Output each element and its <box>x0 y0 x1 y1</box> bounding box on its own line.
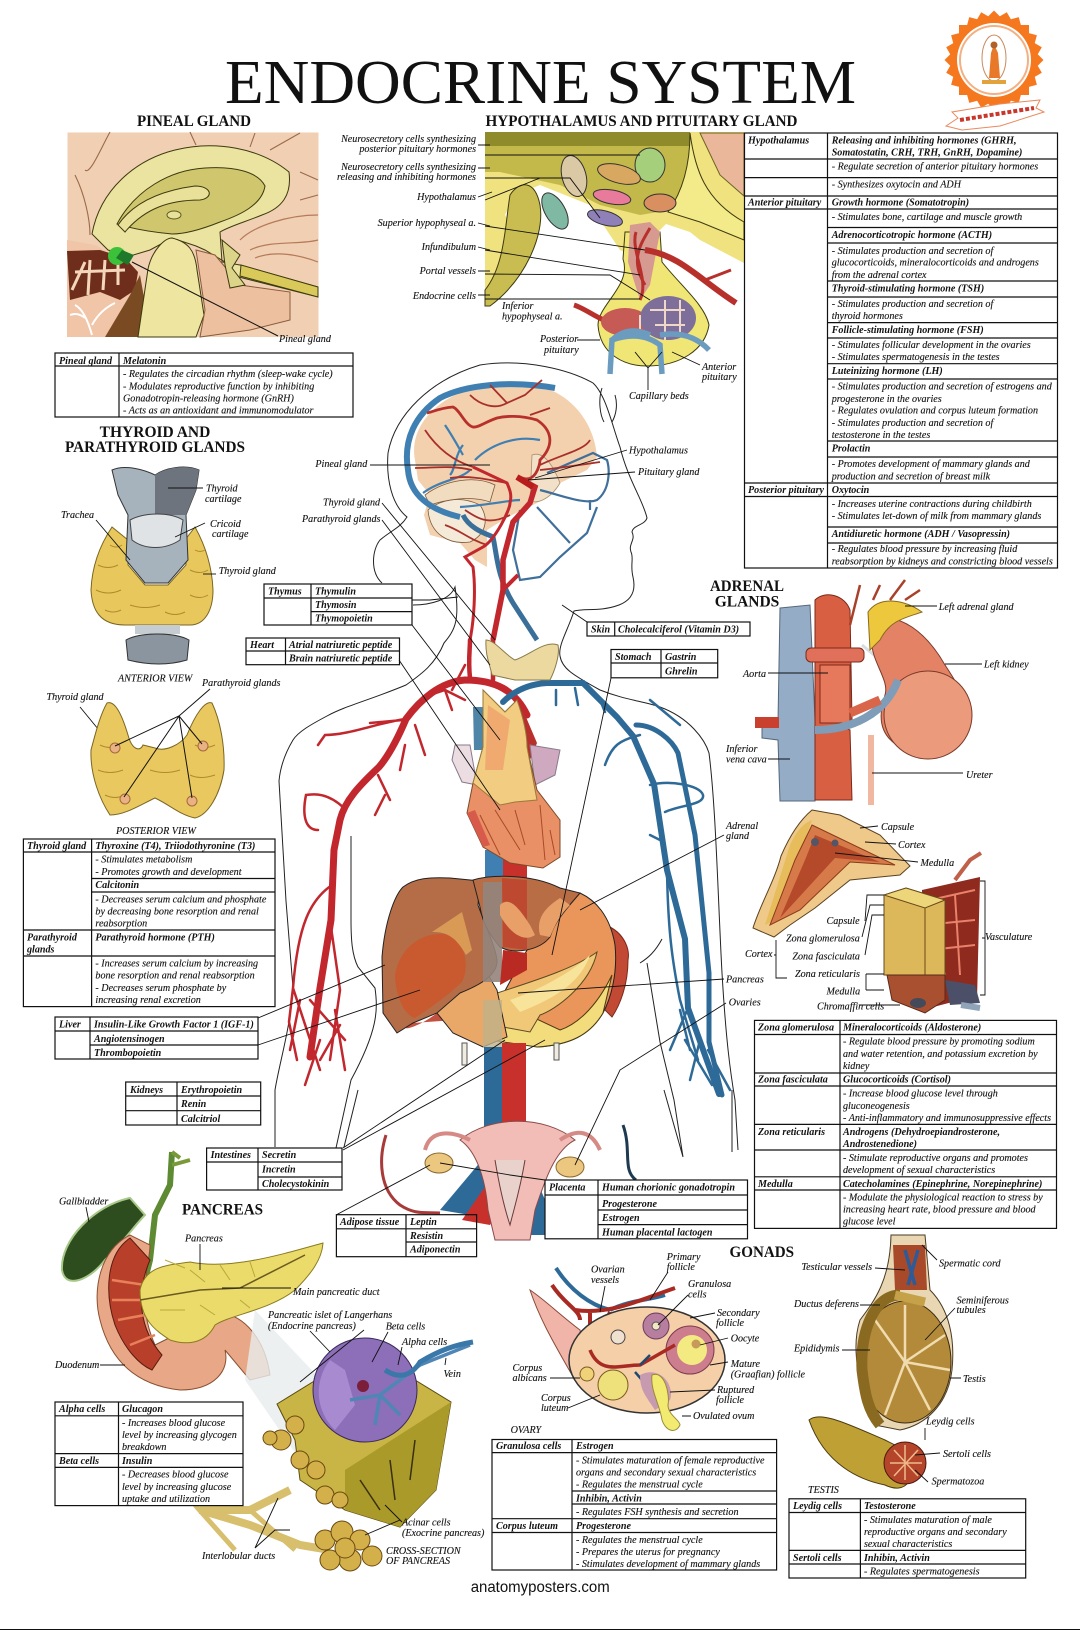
labels: adrenal cross section: Zona reticularis <box>795 969 860 980</box>
labels: hypothalamus callouts: Endocrine cells <box>412 291 476 302</box>
table: ovary hormones: - Regulates FSH synthesis and secretion <box>576 1507 738 1518</box>
table: adrenal zones: Zona glomerulosa <box>757 1023 834 1034</box>
table: thymus <box>264 584 412 625</box>
label: posterior view: POSTERIOR VIEW <box>115 826 197 837</box>
labels: ovary: Ovarian <box>591 1264 625 1276</box>
labels and leader lines: body: Pituitary gland <box>637 467 700 478</box>
table: heart: Atrial natriuretic peptide <box>288 640 393 651</box>
labels: hypothalamus callouts: Infundibulum <box>421 242 476 253</box>
table: hypothalamus and pituitary hormones: - Stimulates production and secretion of <box>832 418 994 429</box>
table: kidneys: Kidneys <box>129 1085 163 1096</box>
table: hypothalamus and pituitary hormones: - Regulates blood pressure by increasing fluid <box>832 544 1018 555</box>
labels: testis: Sertoli cells <box>943 1449 991 1460</box>
table: adipose tissue: Adipose tissue <box>339 1217 400 1228</box>
table: hypothalamus and pituitary hormones: - Stimulates follicular development in the ovaries <box>832 340 1031 351</box>
table: liver: Angiotensinogen <box>93 1034 165 1045</box>
table: thyroid and parathyroid hormones: Thyroid gland <box>27 841 87 852</box>
table: pineal gland melatonin: - Modulates reproductive function by inhibiting <box>123 382 314 392</box>
labels and leader lines: body: Ovaries <box>729 998 761 1009</box>
labels: testis: Epididymis <box>793 1344 839 1355</box>
table: hypothalamus and pituitary hormones: Posterior pituitary <box>748 485 825 496</box>
table: hypothalamus and pituitary hormones: Releasing and inhibiting hormones (GHRH, <box>831 136 1017 146</box>
table: stomach: Ghrelin <box>665 666 698 677</box>
table: pineal gland melatonin: Pineal gland <box>59 356 113 367</box>
illustration: thymus <box>486 640 558 680</box>
labels: thyroid anterior: Thyroid <box>206 484 239 495</box>
heading: adrenal glands <box>710 578 784 610</box>
labels: ovary: Secondary <box>717 1308 760 1319</box>
table: kidneys <box>126 1082 261 1125</box>
labels: hypothalamus callouts: Capillary beds <box>629 391 689 402</box>
table: hypothalamus and pituitary hormones: Prolactin <box>832 444 871 455</box>
table: adipose tissue <box>336 1215 477 1257</box>
labels: hypothalamus callouts: Neurosecretory cells synthesizing <box>340 134 476 145</box>
table: hypothalamus and pituitary hormones <box>744 133 1058 568</box>
labels: pancreas: Alpha cells <box>401 1337 447 1348</box>
table: thymus: Thymosin <box>315 600 357 611</box>
table: ovary hormones: - Stimulates development of mammary glands <box>576 1559 760 1570</box>
labels: ovary: Ovulated ovum <box>693 1411 754 1422</box>
table: hypothalamus and pituitary hormones: from the adrenal cortex <box>832 270 927 281</box>
table: hypothalamus and pituitary hormones: Hypothalamus <box>747 136 809 146</box>
labels: thyroid anterior: Thyroid gland <box>46 692 105 703</box>
labels and leader lines: body: Parathyroid glands <box>301 514 380 525</box>
table: hypothalamus and pituitary hormones: - Stimulates spermatogenesis in the testes <box>832 352 1000 363</box>
table: thyroid and parathyroid hormones: - Stimulates metabolism <box>95 855 192 866</box>
labels: hypothalamus callouts <box>337 134 737 402</box>
table: testis hormones: - Stimulates maturation of male <box>864 1515 992 1526</box>
table: skin: Cholecalciferol (Vitamin D3) <box>618 625 739 636</box>
illustration: vena cava and aorta <box>452 703 560 910</box>
table: adipose tissue: Adiponectin <box>409 1244 461 1256</box>
labels: pancreas: Vein <box>444 1369 461 1380</box>
labels: adrenal cross section <box>745 822 1033 1012</box>
table: thyroid and parathyroid hormones: by decreasing bone resorption and renal <box>95 907 259 918</box>
table: hypothalamus and pituitary hormones: testosterone in the testes <box>832 430 930 441</box>
table: adrenal zones: and water retention, and potassium excretion by <box>843 1049 1038 1060</box>
illustration: heart <box>467 690 560 868</box>
table: adrenal zones: Zona reticularis <box>757 1127 825 1138</box>
table: adrenal zones: increasing heart rate, blood pressure and blood <box>843 1205 1037 1216</box>
table: placenta: Progesterone <box>602 1199 657 1210</box>
labels: thyroid anterior: Cricoid <box>210 519 242 530</box>
table: hypothalamus and pituitary hormones: - Stimulates production and secretion of estrogens and <box>832 382 1053 393</box>
labels: pancreas: Acinar cells <box>401 1518 451 1529</box>
labels: ovary: Primary <box>666 1252 701 1263</box>
panel: human body with endocrine organs <box>55 363 764 1257</box>
table: adrenal zones: - Regulate blood pressure by promoting sodium <box>843 1036 1035 1048</box>
table: hypothalamus and pituitary hormones: - Stimulates let-down of milk from mammary glands <box>832 511 1041 522</box>
labels: adrenal cross section: Medulla <box>826 987 860 998</box>
heading: adrenal glands: ADRENAL <box>710 578 784 595</box>
labels: ovary: cells <box>688 1290 707 1301</box>
table: hypothalamus and pituitary hormones: Thyroid-stimulating hormone (TSH) <box>832 284 984 294</box>
labels: ovary: Granulosa <box>688 1279 731 1290</box>
labels: ovary: Corpus <box>541 1393 571 1404</box>
labels: ovary: albicans <box>512 1373 547 1384</box>
labels: ovary: vessels <box>591 1275 619 1286</box>
table: skin: Skin <box>591 625 610 636</box>
table: hypothalamus and pituitary hormones: - Synthesizes oxytocin and ADH <box>832 180 962 191</box>
illustration: thyroid posterior view <box>91 689 224 818</box>
table: alpha and beta cells: level by increasing glucose <box>122 1482 232 1493</box>
table: ovary hormones: Inhibin, Activin <box>575 1494 642 1504</box>
labels: ovary: (Graafian) follicle <box>731 1370 806 1380</box>
table: thyroid and parathyroid hormones: - Decreases serum calcium and phosphate <box>95 895 267 906</box>
labels: ovary <box>511 1252 806 1436</box>
table: hypothalamus and pituitary hormones: Antidiuretic hormone (ADH / Vasopressin) <box>831 529 1010 540</box>
labels: pancreas: Pancreas <box>184 1234 223 1244</box>
table: testis hormones: reproductive organs and secondary <box>864 1527 1007 1538</box>
table: hypothalamus and pituitary hormones: Anterior pituitary <box>747 198 822 209</box>
table: stomach: Gastrin <box>665 652 697 663</box>
labels: hypothalamus callouts: Anterior <box>701 362 736 373</box>
table: kidneys: Calcitriol <box>181 1114 220 1125</box>
labels: ovary: luteum <box>541 1403 568 1414</box>
labels: pancreas <box>54 1197 485 1567</box>
table: hypothalamus and pituitary hormones: - Stimulates production and secretion of <box>832 299 994 310</box>
table: ovary hormones: - Stimulates maturation of female reproductive <box>576 1456 765 1467</box>
labels: thyroid anterior: Trachea <box>61 510 94 521</box>
heading: adrenal glands: GLANDS <box>715 594 779 610</box>
illustration: testis <box>809 1235 953 1488</box>
labels: testis: Spermatozoa <box>932 1477 984 1488</box>
illustration: kidney, aorta and vena cava <box>755 580 972 805</box>
table: alpha and beta cells: level by increasing glycogen <box>122 1430 237 1441</box>
labels: pancreas: Interlobular ducts <box>201 1551 275 1562</box>
table: thyroid and parathyroid hormones: increasing renal excretion <box>95 995 201 1006</box>
table: adrenal zones <box>754 1020 1056 1228</box>
table: adrenal zones: kidney <box>843 1061 870 1072</box>
table: thymus: Thymus <box>268 586 302 597</box>
labels: pancreas: Beta cells <box>386 1322 425 1333</box>
table: thyroid and parathyroid hormones: reabsorption <box>95 919 147 930</box>
heading: thyroid and parathyroid <box>65 424 245 456</box>
labels: pancreas: CROSS-SECTION <box>386 1546 462 1557</box>
table: alpha and beta cells: - Increases blood glucose <box>122 1418 226 1429</box>
labels: testis: Ductus deferens <box>793 1299 859 1310</box>
table: heart <box>246 638 400 665</box>
footer: website: anatomyposters.com <box>471 1579 610 1596</box>
labels: pancreas: (Exocrine pancreas) <box>402 1528 485 1539</box>
table: liver: Insulin-Like Growth Factor 1 (IGF-1) <box>93 1020 254 1031</box>
table: liver: Thrombopoietin <box>94 1048 162 1059</box>
illustration: ovary <box>530 1268 725 1430</box>
table: skin <box>587 622 750 636</box>
illustration: pelvic reproductive organs <box>382 1121 636 1240</box>
labels: pancreas: Duodenum <box>54 1360 99 1371</box>
logo: orange sunburst emblem <box>945 11 1044 130</box>
labels: ovary: Corpus <box>512 1363 542 1374</box>
labels: thyroid anterior: ANTERIOR VIEW <box>117 674 194 684</box>
labels: hypothalamus callouts: releasing and inhibiting hormones <box>337 172 476 183</box>
table: alpha and beta cells: Glucagon <box>122 1404 163 1415</box>
labels: ovary: Ruptured <box>716 1385 755 1396</box>
panel: pancreas <box>54 1152 485 1571</box>
table: hypothalamus and pituitary hormones: - Promotes development of mammary glands and <box>832 459 1031 470</box>
table: alpha and beta cells: - Decreases blood glucose <box>122 1470 229 1481</box>
table: placenta <box>545 1180 748 1239</box>
table: pineal gland melatonin: - Regulates the circadian rhythm (sleep-wake cycle) <box>123 369 333 380</box>
heading: gonads: GONADS <box>730 1244 794 1261</box>
table: thyroid and parathyroid hormones: Thyroxine (T4), Triiodothyronine (T3) <box>95 841 255 852</box>
labels: pancreas: (Endocrine pancreas) <box>268 1321 357 1332</box>
labels: pancreas: Main pancreatic duct <box>292 1287 380 1298</box>
labels: ovary: Oocyte <box>731 1334 760 1345</box>
table: placenta: Estrogen <box>601 1213 640 1224</box>
labels and leader lines: body <box>258 446 764 1215</box>
labels: adrenal cross section: Chromaffin cells <box>817 1001 884 1012</box>
table: adipose tissue: Resistin <box>409 1231 443 1242</box>
labels: thyroid anterior: Parathyroid glands <box>201 678 280 689</box>
table: testis hormones: Sertoli cells <box>793 1553 842 1564</box>
table: alpha and beta cells: uptake and utilization <box>122 1494 210 1505</box>
labels: adrenal cross section: Cortex <box>745 949 773 960</box>
table: adrenal zones: - Anti-inflammatory and immunosuppressive effects <box>843 1113 1051 1124</box>
illustration: abdominal organs <box>382 876 628 1160</box>
table: hypothalamus and pituitary hormones: Oxytocin <box>832 485 870 496</box>
table: thyroid and parathyroid hormones: - Promotes growth and development <box>95 867 242 878</box>
table: ovary hormones: - Prepares the uterus for pregnancy <box>576 1547 720 1558</box>
labels and leader lines: body: Adrenal <box>725 821 758 832</box>
illustration: brain <box>407 380 609 640</box>
table: hypothalamus and pituitary hormones: Adrenocorticotropic hormone (ACTH) <box>831 230 992 241</box>
heading: hypothalamus and pituitary: HYPOTHALAMUS AND PITUITARY GLAND <box>486 113 798 130</box>
labels: testis <box>793 1245 1009 1496</box>
table: ovary hormones: - Regulates the menstrual cycle <box>576 1535 703 1546</box>
labels: kidney <box>725 602 1029 781</box>
table: testis hormones: Leydig cells <box>792 1501 842 1512</box>
labels: ovary: Mature <box>730 1359 761 1370</box>
table: alpha and beta cells: breakdown <box>122 1442 166 1453</box>
labels: hypothalamus callouts: Inferior <box>501 301 533 312</box>
illustration: hypothalamus and pituitary <box>485 132 744 374</box>
table: intestines: Secretin <box>262 1150 297 1161</box>
labels: thyroid anterior <box>46 484 280 735</box>
labels: adrenal cross section: Zona glomerulosa <box>786 934 860 944</box>
table: hypothalamus and pituitary hormones: glucocorticoids, mineralocorticoids and androgens <box>832 258 1039 269</box>
labels: kidney: Aorta <box>742 669 766 680</box>
labels: adrenal cross section: Vasculature <box>985 932 1033 943</box>
table: thyroid and parathyroid hormones: Parathyroid hormone (PTH) <box>95 932 215 944</box>
table: ovary hormones <box>492 1440 777 1570</box>
table: adrenal zones: Medulla <box>757 1179 793 1190</box>
table: hypothalamus and pituitary hormones: - Regulates ovulation and corpus luteum formation <box>832 406 1038 417</box>
table: adipose tissue: Leptin <box>409 1217 437 1228</box>
table: adrenal zones: glucose level <box>843 1217 896 1228</box>
table: pineal gland melatonin <box>55 353 353 417</box>
labels: testis: Spermatic cord <box>939 1259 1002 1270</box>
table: kidneys: Erythropoietin <box>180 1085 243 1096</box>
panel: pineal gland <box>55 113 353 417</box>
labels: hypothalamus callouts: Portal vessels <box>419 266 476 277</box>
table: adrenal zones: Androgens (Dehydroepiandrosterone, <box>842 1127 1000 1138</box>
table: ovary hormones: Granulosa cells <box>496 1441 561 1452</box>
labels: hypothalamus callouts: pituitary <box>543 345 579 356</box>
labels and leader lines: body: gland <box>726 831 750 842</box>
labels: testis: Leydig cells <box>925 1417 975 1428</box>
labels: kidney: vena cava <box>726 754 767 766</box>
labels: hypothalamus callouts: Hypothalamus <box>416 192 476 203</box>
labels: kidney: Left adrenal gland <box>938 602 1015 613</box>
body outline <box>275 363 738 1157</box>
table: adrenal zones: Catecholamines (Epinephrine, Norepinephrine) <box>843 1179 1042 1190</box>
table: hypothalamus and pituitary hormones: - Stimulates production and secretion of <box>832 246 994 257</box>
table: thyroid and parathyroid hormones: bone resorption and renal reabsorption <box>95 971 255 982</box>
panel: adrenal glands <box>710 578 1056 1228</box>
labels and leader lines: body: Pancreas <box>725 974 764 986</box>
labels and leader lines: body: Hypothalamus <box>628 446 688 457</box>
panel: gonads <box>492 1235 1026 1578</box>
table: adrenal zones: Zona fasciculata <box>757 1075 828 1086</box>
table: thymus: Thymopoietin <box>315 614 373 625</box>
panel: hypothalamus and pituitary gland <box>337 113 1058 568</box>
label: pineal gland: Pineal gland <box>278 334 332 345</box>
labels: ovary: OVARY <box>511 1425 542 1436</box>
table: heart: Brain natriuretic peptide <box>288 654 393 665</box>
table: ovary hormones: Estrogen <box>575 1441 614 1452</box>
labels: thyroid anterior: cartilage <box>212 529 249 540</box>
table: hypothalamus and pituitary hormones: - Increases uterine contractions during childbirth <box>832 499 1032 510</box>
table: placenta: Placenta <box>549 1182 585 1194</box>
table: placenta: Human placental lactogen <box>601 1227 713 1238</box>
table: hypothalamus and pituitary hormones: reabsorption by kidneys and constricting blood vessels <box>832 557 1053 568</box>
table: kidneys: Renin <box>180 1099 207 1110</box>
labels: testis: TESTIS <box>808 1485 839 1496</box>
table: hypothalamus and pituitary hormones: Growth hormone (Somatotropin) <box>832 198 969 209</box>
table: adrenal zones: Glucocorticoids (Cortisol) <box>843 1075 951 1086</box>
table: hypothalamus and pituitary hormones: Somatostatin, CRH, TRH, GnRH, Dopamine) <box>832 147 1022 158</box>
table: testis hormones: Testosterone <box>864 1501 916 1512</box>
table: testis hormones: sexual characteristics <box>864 1539 952 1550</box>
labels: hypothalamus callouts: hypophyseal a. <box>502 312 563 322</box>
heading: pancreas: PANCREAS <box>182 1202 263 1219</box>
table: hypothalamus and pituitary hormones: progesterone in the ovaries <box>831 394 942 405</box>
labels: pancreas: Gallbladder <box>59 1197 108 1208</box>
title: ENDOCRINE SYSTEM <box>225 49 856 117</box>
table: liver: Liver <box>58 1020 81 1031</box>
table: hypothalamus and pituitary hormones: production and secretion of breast milk <box>831 472 991 482</box>
labels: adrenal cross section: Capsule <box>881 822 915 833</box>
labels: hypothalamus callouts: Neurosecretory cells synthesizing <box>340 162 476 173</box>
table: adrenal zones: gluconeogenesis <box>843 1101 910 1112</box>
table: alpha and beta cells <box>55 1402 243 1506</box>
table: adrenal zones: - Modulate the physiological reaction to stress by <box>843 1192 1043 1204</box>
labels: hypothalamus callouts: pituitary <box>701 372 737 383</box>
illustration: thyroid anterior view <box>91 467 213 664</box>
labels: kidney: Ureter <box>966 770 993 781</box>
table: stomach: Stomach <box>615 652 652 663</box>
labels and leader lines: body: Pineal gland <box>314 459 368 470</box>
table: hypothalamus and pituitary hormones: - Regulate secretion of anterior pituitary hormones <box>832 161 1038 172</box>
table: intestines: Cholecystokinin <box>262 1179 330 1190</box>
labels: hypothalamus callouts: posterior pituitary hormones <box>358 144 476 155</box>
illustration: gallbladder, duodenum and pancreas <box>62 1152 340 1460</box>
illustration: brain sagittal section <box>67 132 318 337</box>
labels: adrenal cross section: Zona fasciculata <box>792 952 860 962</box>
table: hypothalamus and pituitary hormones: thyroid hormones <box>832 311 903 322</box>
labels: testis: Seminiferous <box>956 1296 1009 1306</box>
table: stomach <box>611 650 718 678</box>
labels: pancreas: OF PANCREAS <box>386 1556 450 1567</box>
table: thymus: Thymulin <box>315 586 356 597</box>
labels: testis: Testis <box>963 1374 986 1385</box>
heading: thyroid and parathyroid: PARATHYROID GLANDS <box>65 439 245 456</box>
table: testis hormones: Inhibin, Activin <box>863 1553 930 1564</box>
heading: pineal gland: PINEAL GLAND <box>137 113 251 130</box>
table: ovary hormones: - Regulates the menstrual cycle <box>576 1480 703 1491</box>
table: thyroid and parathyroid hormones: Calcitonin <box>95 880 140 891</box>
labels: hypothalamus callouts: Posterior <box>539 334 578 345</box>
illustration: veins <box>503 683 730 1095</box>
labels: pancreas: Pancreatic islet of Langerhans <box>267 1310 392 1321</box>
table: thyroid and parathyroid hormones: glands <box>26 944 55 956</box>
labels: kidney: Inferior <box>725 744 757 755</box>
panel: thyroid and parathyroid glands <box>23 424 280 1007</box>
labels: ovary: follicle <box>667 1262 695 1273</box>
table: placenta: Human chorionic gonadotropin <box>601 1182 735 1194</box>
table: ovary hormones: organs and secondary sexual characteristics <box>576 1468 756 1479</box>
table: alpha and beta cells: Insulin <box>121 1456 153 1467</box>
labels: ovary: follicle <box>716 1395 745 1406</box>
table: alpha and beta cells: Beta cells <box>58 1456 99 1467</box>
labels: hypothalamus callouts: Superior hypophyseal a. <box>378 218 476 229</box>
table: adrenal zones: - Stimulate reproductive organs and promotes <box>843 1153 1028 1164</box>
table: adrenal zones: development of sexual characteristics <box>843 1165 995 1176</box>
table: hypothalamus and pituitary hormones: Luteinizing hormone (LH) <box>831 366 943 377</box>
table: intestines: Incretin <box>261 1165 296 1176</box>
table: testis hormones <box>789 1499 1026 1578</box>
labels and leader lines: body: Thyroid gland <box>323 498 381 508</box>
table: adrenal zones: Mineralocorticoids (Aldosterone) <box>842 1023 981 1034</box>
table: adrenal zones: Androstenedione) <box>842 1139 917 1150</box>
heading: thyroid and parathyroid: THYROID AND <box>100 424 210 441</box>
table: intestines: Intestines <box>210 1150 251 1161</box>
table: hypothalamus and pituitary hormones: - Stimulates bone, cartilage and muscle growth <box>832 212 1022 223</box>
labels: adrenal cross section: Capsule <box>826 916 860 927</box>
table: hypothalamus and pituitary hormones: Follicle-stimulating hormone (FSH) <box>831 325 984 336</box>
labels: adrenal cross section: Cortex <box>898 840 926 851</box>
table: ovary hormones: Corpus luteum <box>496 1521 558 1532</box>
illustration: pancreas cross section with islet <box>195 1338 473 1571</box>
labels: kidney: Left kidney <box>983 659 1029 670</box>
illustration: adrenal cross section <box>753 810 981 1013</box>
table: liver <box>55 1017 258 1059</box>
table: pineal gland melatonin: Gonadotropin-releasing hormone (GnRH) <box>123 394 294 404</box>
table: thyroid and parathyroid hormones: Parathyroid <box>27 932 78 944</box>
labels: testis: Testicular vessels <box>802 1262 872 1273</box>
labels: thyroid anterior: cartilage <box>205 494 242 505</box>
illustration: arteries <box>289 640 527 1085</box>
table: ovary hormones: Progesterone <box>576 1521 631 1532</box>
labels: adrenal cross section: Medulla <box>920 858 954 869</box>
labels: thyroid anterior: Thyroid gland <box>219 566 277 577</box>
table: pineal gland melatonin: Melatonin <box>122 356 167 367</box>
table: testis hormones: - Regulates spermatogenesis <box>864 1566 980 1578</box>
table: thyroid and parathyroid hormones <box>23 839 275 1007</box>
table: pineal gland melatonin: - Acts as an antioxidant and immunomodulator <box>123 406 314 416</box>
table: thyroid and parathyroid hormones: - Increases serum calcium by increasing <box>95 958 258 969</box>
table: alpha and beta cells: Alpha cells <box>58 1404 105 1415</box>
table: intestines <box>207 1148 342 1190</box>
table: adrenal zones: - Increase blood glucose level through <box>843 1088 998 1100</box>
table: thyroid and parathyroid hormones: - Decreases serum phosphate by <box>95 983 227 994</box>
labels: testis: tubules <box>956 1305 986 1316</box>
labels: ovary: follicle <box>716 1318 745 1329</box>
table: heart: Heart <box>249 640 275 651</box>
